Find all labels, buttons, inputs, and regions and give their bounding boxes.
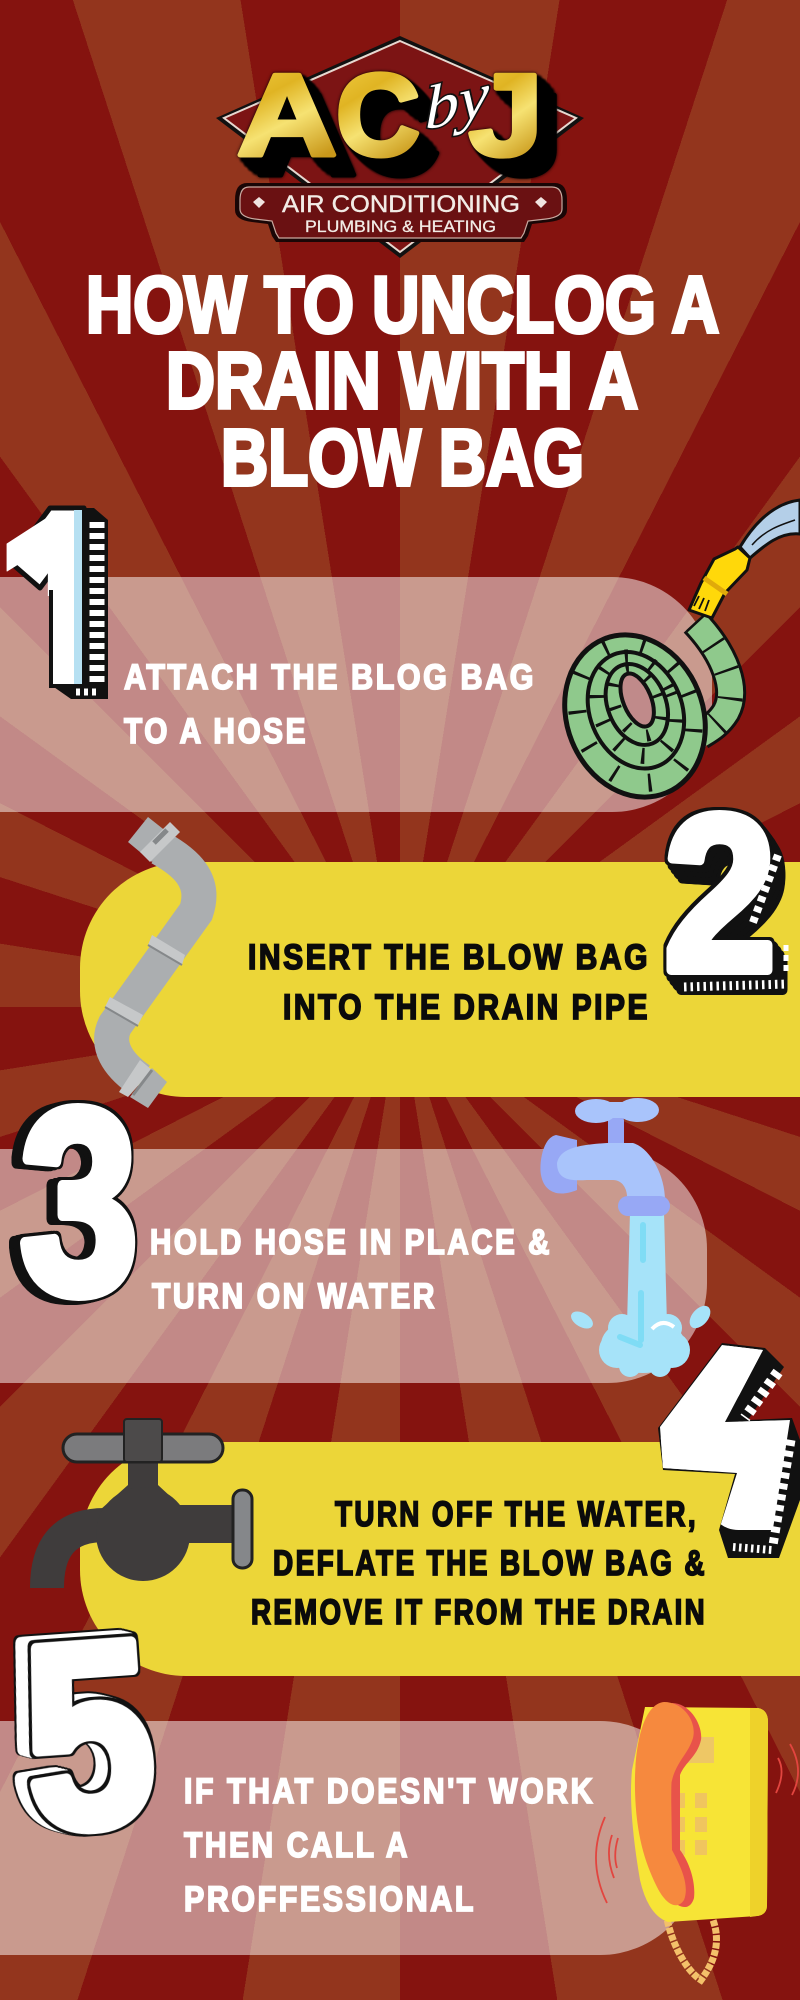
panel: step 2 bbox=[80, 862, 800, 1097]
body bbox=[96, 1487, 190, 1581]
panel: step 1 bbox=[0, 577, 712, 812]
step 2 text bbox=[248, 938, 650, 1027]
handle post bbox=[124, 1419, 162, 1462]
logo letters bbox=[237, 50, 543, 180]
pipe band upper bbox=[148, 935, 185, 965]
step 3 text: HOLD HOSE IN PLACE & bbox=[150, 1223, 552, 1262]
step 4 text bbox=[251, 1495, 707, 1632]
hose water spray bbox=[740, 500, 800, 558]
step 4 text: TURN OFF THE WATER, bbox=[335, 1495, 698, 1534]
faucet stem and handle bbox=[608, 1115, 624, 1173]
flange bbox=[233, 1490, 252, 1568]
step 1 text: TO A HOSE bbox=[124, 712, 308, 751]
faucet back flange bbox=[540, 1135, 577, 1194]
ring lines bbox=[596, 1744, 798, 1903]
title bbox=[86, 260, 719, 502]
water splash bbox=[568, 1302, 714, 1377]
phone cord bbox=[666, 1913, 716, 1980]
step 3 text bbox=[150, 1223, 552, 1316]
phone body bbox=[631, 1707, 768, 1922]
step 5 text bbox=[184, 1772, 595, 1919]
step 3 text: TURN ON WATER bbox=[152, 1277, 437, 1316]
water stream bbox=[627, 1212, 667, 1325]
icon: garden hose bbox=[541, 500, 800, 818]
step 5 text: IF THAT DOESN'T WORK bbox=[184, 1772, 595, 1811]
logo script: by: by bbox=[425, 60, 490, 144]
number 3: 3 bbox=[20, 1055, 138, 1348]
logo plaque: PLUMBING & HEATING bbox=[305, 217, 496, 236]
step 5 text: THEN CALL A bbox=[184, 1826, 410, 1865]
number 2: 2 bbox=[664, 770, 776, 1018]
step 1 text bbox=[124, 658, 536, 751]
faucet body bbox=[557, 1143, 665, 1200]
number 4: 4 bbox=[650, 1288, 800, 1556]
title: BLOW BAG bbox=[221, 413, 584, 502]
logo plaque: AIR CONDITIONING bbox=[282, 191, 520, 218]
step 1 text: ATTACH THE BLOG BAG bbox=[124, 658, 536, 697]
spout bbox=[47, 1525, 105, 1588]
side stripes bbox=[51, 508, 108, 699]
logo letters: A bbox=[237, 50, 337, 180]
panel: step 4 bbox=[80, 1442, 800, 1676]
hose nozzle bbox=[689, 547, 750, 618]
extrusion of the four bbox=[658, 1343, 800, 1558]
pipe top cap bbox=[128, 817, 180, 862]
phone keypad bbox=[673, 1793, 707, 1855]
logo diamond bbox=[216, 36, 584, 258]
panel: step 3 bbox=[0, 1149, 707, 1383]
number 1 bbox=[6, 506, 108, 699]
pipe band lower bbox=[105, 997, 143, 1026]
hose coil bbox=[541, 614, 729, 818]
faucet collar bbox=[618, 1196, 670, 1216]
step 2 text: INTO THE DRAIN PIPE bbox=[283, 988, 650, 1027]
outlet bbox=[150, 1505, 238, 1543]
step 2 text: INSERT THE BLOW BAG bbox=[248, 938, 650, 977]
icon: drain pipe bbox=[105, 817, 199, 1108]
flag of the one bbox=[10, 508, 84, 600]
panel: step 5 bbox=[0, 1721, 700, 1955]
logo plaque bbox=[235, 183, 567, 242]
handle bbox=[63, 1434, 223, 1462]
icon: yellow wall telephone bbox=[596, 1702, 798, 1980]
logo letters: C bbox=[336, 50, 420, 180]
side stripes of the two bbox=[684, 984, 788, 987]
hose tail bbox=[695, 622, 731, 735]
neck bbox=[100, 1460, 185, 1510]
icon: running blue faucet bbox=[540, 1098, 714, 1377]
logo letters: J bbox=[469, 50, 543, 180]
icon: black faucet shutoff bbox=[47, 1419, 252, 1588]
phone handset bbox=[635, 1702, 701, 1907]
phone hook bbox=[680, 1737, 714, 1763]
logo: AC by J bbox=[216, 36, 584, 258]
number 5: 5 bbox=[15, 1585, 163, 1886]
number 4 bbox=[658, 1343, 800, 1558]
pipe bottom cap bbox=[119, 1060, 167, 1108]
step 5 text: PROFFESSIONAL bbox=[184, 1880, 476, 1919]
title: DRAIN WITH A bbox=[166, 336, 638, 425]
